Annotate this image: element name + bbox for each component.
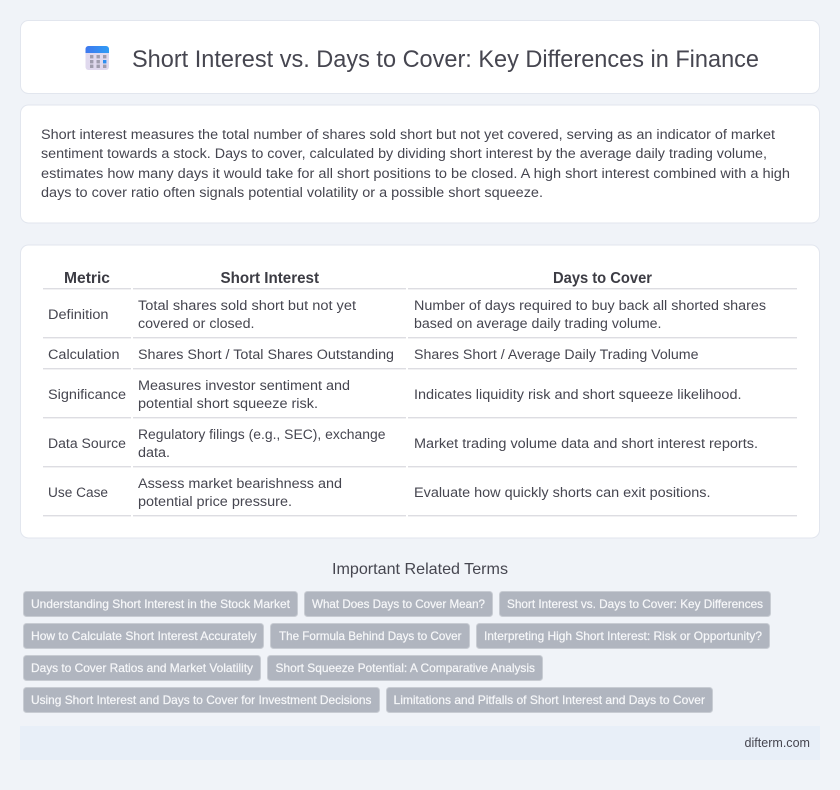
- tag: The Formula Behind Days to Cover: [279, 629, 462, 643]
- tag: [24, 624, 264, 648]
- text block: introduction: sentiment towards a stock. Days to cover, calculated by dividing short interest by the average daily trading volume,: [41, 146, 767, 162]
- tag: Interpreting High Short Interest: Risk or Opportunity?: [484, 629, 762, 643]
- tag: [386, 688, 712, 712]
- panel: header: [20, 20, 820, 94]
- table row: significance: potential short squeeze risk.: [138, 396, 318, 412]
- table header row: Metric: [64, 270, 110, 287]
- tag: [500, 592, 770, 616]
- tag list: related terms: [24, 592, 770, 712]
- table row: definition: Total shares sold short but not yet: [138, 298, 356, 314]
- table row: use case: Use Case: [48, 485, 108, 501]
- panel: comparison table: [20, 245, 820, 538]
- footer: [20, 726, 820, 760]
- table row: calculation: Shares Short / Average Daily Trading Volume: [414, 347, 699, 363]
- table row: significance: Measures investor sentiment and: [138, 378, 350, 394]
- tag: Using Short Interest and Days to Cover for Investment Decisions: [31, 693, 372, 707]
- tag: [268, 656, 542, 680]
- table row: definition: Number of days required to buy back all shorted shares: [414, 298, 766, 314]
- tag: [304, 592, 492, 616]
- footer source text: difterm.com: [744, 735, 810, 750]
- table row: use case: Evaluate how quickly shorts can exit positions.: [414, 485, 710, 501]
- table row: definition: Definition: [48, 307, 108, 323]
- table row: definition: [43, 298, 797, 338]
- tag: Short Squeeze Potential: A Comparative Analysis: [276, 661, 535, 675]
- table row: significance: [43, 378, 797, 418]
- table header row: [43, 270, 797, 289]
- tag: [476, 624, 770, 648]
- tag: What Does Days to Cover Mean?: [312, 597, 485, 611]
- tag: Understanding Short Interest in the Stock Market: [31, 597, 291, 611]
- table row: use case: potential price pressure.: [138, 494, 292, 510]
- table row: data source: Regulatory filings (e.g., SEC), exchange: [138, 427, 386, 443]
- title: Short Interest vs. Days to Cover: Key Differences in Finance: [132, 46, 759, 73]
- panel: introduction: [20, 105, 820, 223]
- table row: significance: Significance: [48, 387, 126, 403]
- tag: Limitations and Pitfalls of Short Interest and Days to Cover: [394, 693, 705, 707]
- table row: definition: covered or closed.: [138, 316, 254, 332]
- table row: data source: Market trading volume data and short interest reports.: [414, 436, 758, 452]
- text block: introduction: Short interest measures the total number of shares sold short but not yet covered, serving as an indicator of market: [41, 127, 775, 143]
- table row: use case: Assess market bearishness and: [138, 476, 342, 492]
- tag: [24, 688, 380, 712]
- tag: Days to Cover Ratios and Market Volatility: [31, 661, 253, 675]
- text block: introduction: estimates how many days it would take for all short positions to be closed. A high short interest combined with a high: [41, 166, 790, 182]
- table row: calculation: Calculation: [48, 347, 120, 363]
- text block: introduction: [41, 127, 790, 201]
- table row: data source: [43, 427, 797, 467]
- tag: [270, 624, 470, 648]
- tag: Short Interest vs. Days to Cover: Key Differences: [507, 597, 763, 611]
- heading: important related terms: Important Related Terms: [332, 561, 508, 578]
- table row: data source: Data Source: [48, 436, 126, 452]
- table row: significance: Indicates liquidity risk and short squeeze likelihood.: [414, 387, 742, 403]
- tag: [24, 592, 298, 616]
- text block: introduction: days to cover ratio often signals potential volatility or a possible short squeeze.: [41, 185, 543, 201]
- tag: How to Calculate Short Interest Accurately: [31, 629, 256, 643]
- table row: calculation: Shares Short / Total Shares Outstanding: [138, 347, 394, 363]
- icon: calendar: [86, 46, 109, 70]
- table row: data source: data.: [138, 445, 170, 461]
- table row: calculation: [43, 347, 797, 369]
- table row: use case: [43, 476, 797, 516]
- table header row: Days to Cover: [553, 270, 652, 287]
- table header row: Short Interest: [220, 270, 320, 287]
- table row: definition: based on average daily trading volume.: [414, 316, 662, 332]
- tag: [24, 656, 260, 680]
